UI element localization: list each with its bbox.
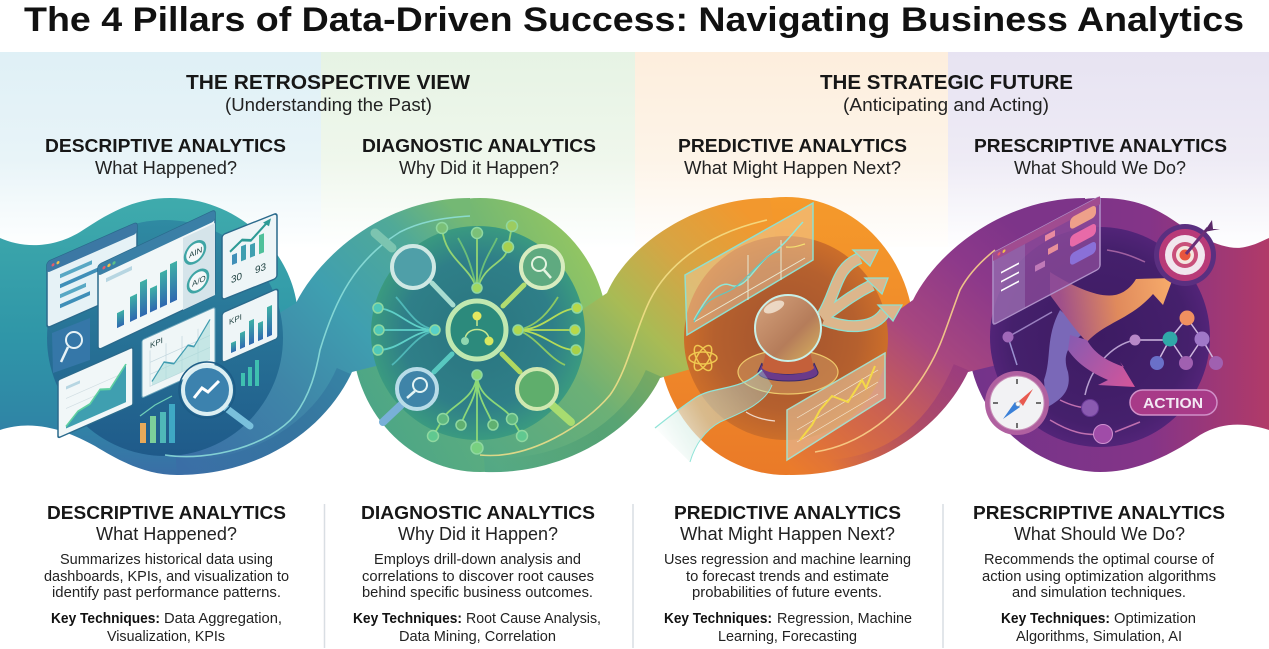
window: area chart: [58, 347, 133, 438]
top heading: diagnostic: [362, 135, 596, 178]
strategy dashboard: [993, 196, 1100, 325]
window: KPI trend card: 93: [255, 262, 266, 277]
arrow to action: [1068, 335, 1135, 387]
title: The 4 Pillars of Data-Driven Success: Navigating Business Analytics: [24, 1, 1244, 39]
question: What Might Happen Next?: [680, 523, 895, 544]
key techniques: Key Techniques:: [664, 611, 772, 627]
description: [362, 552, 594, 601]
key techniques: [664, 611, 912, 645]
dashed paths and nodes: [1008, 250, 1145, 434]
description: to forecast trends and estimate: [686, 569, 889, 585]
icon: target: [1154, 220, 1220, 286]
window: main bar chart: A/O: [192, 273, 206, 289]
small bars: [140, 360, 259, 443]
section heading: strategic future: (Anticipating and Acting): [843, 95, 1049, 115]
key techniques: Data Mining, Correlation: [399, 629, 556, 645]
key techniques: [51, 611, 282, 645]
top heading: predictive: PREDICTIVE ANALYTICS: [678, 135, 907, 156]
text block: descriptive analytics: [44, 502, 289, 645]
top heading: descriptive: [45, 135, 286, 178]
top heading: diagnostic: Why Did it Happen?: [399, 157, 559, 178]
branching future arrows: [822, 250, 902, 326]
central hub: [448, 301, 506, 359]
root-cause trees: [378, 226, 577, 448]
background panels: [0, 52, 1269, 247]
section heading: retrospective view: THE RETROSPECTIVE VIEW: [186, 72, 470, 94]
description: Summarizes historical data using: [60, 552, 273, 568]
magnifier handles: [375, 233, 571, 422]
icon cluster: predictive crystal ball: [655, 203, 902, 462]
question: What Happened?: [96, 523, 237, 544]
top heading: predictive: [678, 135, 907, 178]
icon cluster: descriptive dashboards: [47, 210, 278, 443]
heading: PRESCRIPTIVE ANALYTICS: [973, 502, 1225, 523]
action button: [1130, 390, 1217, 415]
key techniques: Learning, Forecasting: [718, 629, 857, 645]
window: KPI bar card: [222, 288, 278, 363]
top heading: prescriptive: [974, 135, 1227, 178]
top heading: prescriptive: PRESCRIPTIVE ANALYTICS: [974, 135, 1227, 156]
section heading: strategic future: [820, 72, 1073, 115]
key techniques: Key Techniques:: [51, 611, 160, 627]
action button: ACTION: [1143, 395, 1203, 412]
icon: compass: [985, 371, 1049, 435]
window: main bar chart: AIN: [189, 244, 202, 260]
key techniques: Visualization, KPIs: [107, 629, 225, 645]
window: list panel: [47, 222, 137, 328]
section heading: retrospective view: [186, 72, 470, 115]
key techniques: Optimization: [1114, 611, 1196, 627]
flowing ribbon band: [0, 197, 1269, 475]
section heading: retrospective view: (Understanding the Past): [225, 95, 432, 115]
window: KPI trend card: 30: [231, 271, 242, 286]
question: Why Did it Happen?: [398, 523, 558, 544]
description: and simulation techniques.: [1012, 585, 1186, 601]
top heading: predictive: What Might Happen Next?: [684, 157, 901, 178]
description: [982, 552, 1216, 601]
description: behind specific business outcomes.: [362, 585, 593, 601]
description: dashboards, KPIs, and visualization to: [44, 569, 289, 585]
forecast panel upper: [685, 203, 813, 335]
description: action using optimization algorithms: [982, 569, 1216, 585]
key techniques: Regression, Machine: [777, 611, 912, 627]
description: identify past performance patterns.: [52, 585, 281, 601]
description: [664, 552, 911, 601]
description: Uses regression and machine learning: [664, 552, 911, 568]
top heading: descriptive: What Happened?: [95, 157, 237, 178]
window: KPI line chart: KPI: [150, 335, 163, 350]
key techniques: Algorithms, Simulation, AI: [1016, 629, 1182, 645]
top heading: diagnostic: DIAGNOSTIC ANALYTICS: [362, 135, 596, 156]
section heading: strategic future: THE STRATEGIC FUTURE: [820, 72, 1073, 94]
tile: magnifier: [52, 318, 90, 373]
description: Employs drill-down analysis and: [374, 552, 581, 568]
column dividers: [324, 504, 943, 648]
text block: predictive analytics: [664, 502, 912, 645]
top heading: descriptive: DESCRIPTIVE ANALYTICS: [45, 135, 286, 156]
description: correlations to discover root causes: [362, 569, 594, 585]
blue stem: [1044, 310, 1085, 408]
text block: diagnostic analytics: [353, 502, 601, 645]
top heading: prescriptive: What Should We Do?: [1014, 157, 1186, 178]
heading: DESCRIPTIVE ANALYTICS: [47, 502, 286, 523]
crystal ball on base: [738, 295, 838, 394]
arrow to target: [1050, 272, 1173, 342]
flowing data stream: [655, 370, 775, 462]
key techniques: Root Cause Analysis,: [466, 611, 601, 627]
window: main bar chart: [98, 210, 215, 350]
window: KPI trend card: [222, 213, 277, 300]
question: What Should We Do?: [1014, 523, 1185, 544]
path nodes: [1002, 332, 1112, 444]
heading: DIAGNOSTIC ANALYTICS: [361, 502, 595, 523]
key techniques: Key Techniques:: [1001, 611, 1110, 627]
window: KPI line chart: [142, 307, 215, 398]
decision tree: [1130, 310, 1223, 370]
magnifier with trend: [179, 362, 250, 426]
heading: PREDICTIVE ANALYTICS: [674, 502, 901, 523]
text block: prescriptive analytics: [973, 502, 1225, 645]
atom symbol: [689, 343, 717, 373]
icon cluster: prescriptive decisions: [985, 196, 1223, 444]
description: probabilities of future events.: [692, 585, 882, 601]
description: Recommends the optimal course of: [984, 552, 1215, 568]
key techniques: Key Techniques:: [353, 611, 462, 627]
magnifiers: [392, 246, 563, 409]
window: KPI bar card: KPI: [229, 312, 242, 327]
description: [44, 552, 289, 601]
key techniques: [1001, 611, 1196, 645]
tree nodes: [373, 220, 582, 454]
icon cluster: diagnostic network: [373, 220, 582, 454]
forecast panel lower: [787, 353, 885, 460]
key techniques: [353, 611, 601, 645]
key techniques: Data Aggregation,: [164, 611, 282, 627]
